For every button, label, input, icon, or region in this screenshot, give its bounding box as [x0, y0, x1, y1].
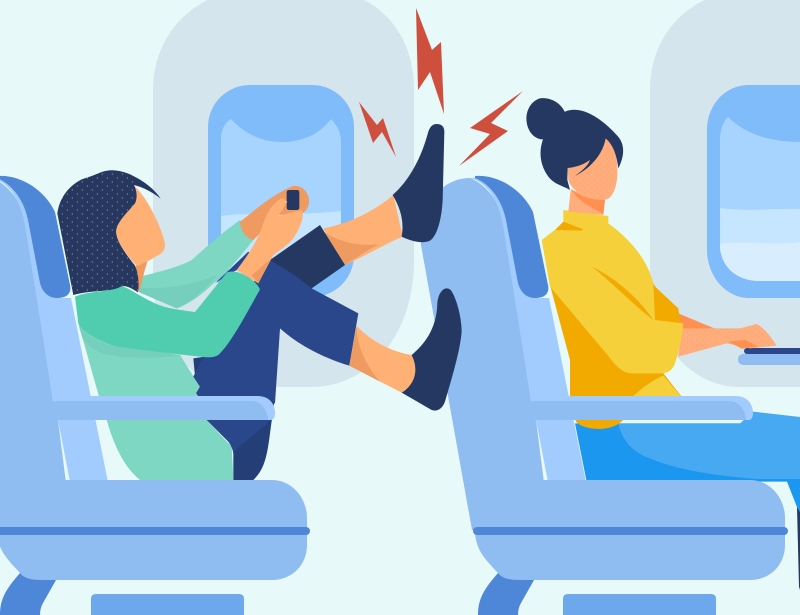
window: left: [208, 85, 354, 297]
hips back shading: [193, 327, 280, 480]
lightning bolts: [359, 8, 523, 166]
phone: [287, 190, 299, 210]
cushion strip: rear row: [0, 527, 310, 535]
far shorts: [270, 225, 345, 288]
near sleeve: [75, 272, 260, 357]
under-seat block: rear row: [91, 594, 244, 615]
torso shade: [79, 327, 182, 358]
seat cushion: [475, 480, 785, 580]
her legs: [575, 412, 800, 590]
seat cushion: rear row: [0, 480, 307, 580]
armrest: rear row: [53, 396, 275, 420]
cushion strip: [473, 527, 788, 535]
sweater: [542, 210, 683, 429]
passenger in front: woman in yellow sweater: [526, 98, 800, 590]
near hand: [237, 198, 303, 283]
under-seat block: front row: [563, 594, 716, 615]
near sock: [402, 288, 462, 411]
seat legs: rear row: [0, 573, 60, 615]
face: [116, 185, 165, 266]
near leg and shorts: [193, 252, 358, 453]
seat back: [421, 178, 550, 530]
seat: front row: [421, 176, 788, 615]
seat back: rear row: [0, 176, 108, 530]
hair: [57, 170, 161, 295]
neck: [135, 262, 147, 291]
seat back side band: [470, 178, 586, 482]
torso: [78, 323, 233, 480]
window: right: [707, 85, 800, 298]
far hand: [240, 186, 309, 240]
cabin wall panel: left: [153, 0, 414, 387]
hair and bun: [526, 98, 623, 190]
cabin wall panel: right: [650, 0, 800, 387]
seat legs: [478, 573, 538, 615]
far sleeve: [138, 220, 253, 308]
near calf: [349, 326, 416, 393]
neck: [568, 188, 605, 215]
wrist shading: [252, 259, 270, 283]
passenger kicking: woman in green sweater: [57, 124, 462, 480]
headrest: [0, 176, 70, 298]
armrest: [531, 396, 753, 420]
face: [568, 137, 617, 200]
tray table: [738, 348, 800, 365]
headrest: [475, 176, 548, 298]
her forearm: [678, 313, 777, 357]
far leg lower and sock: [323, 124, 444, 266]
